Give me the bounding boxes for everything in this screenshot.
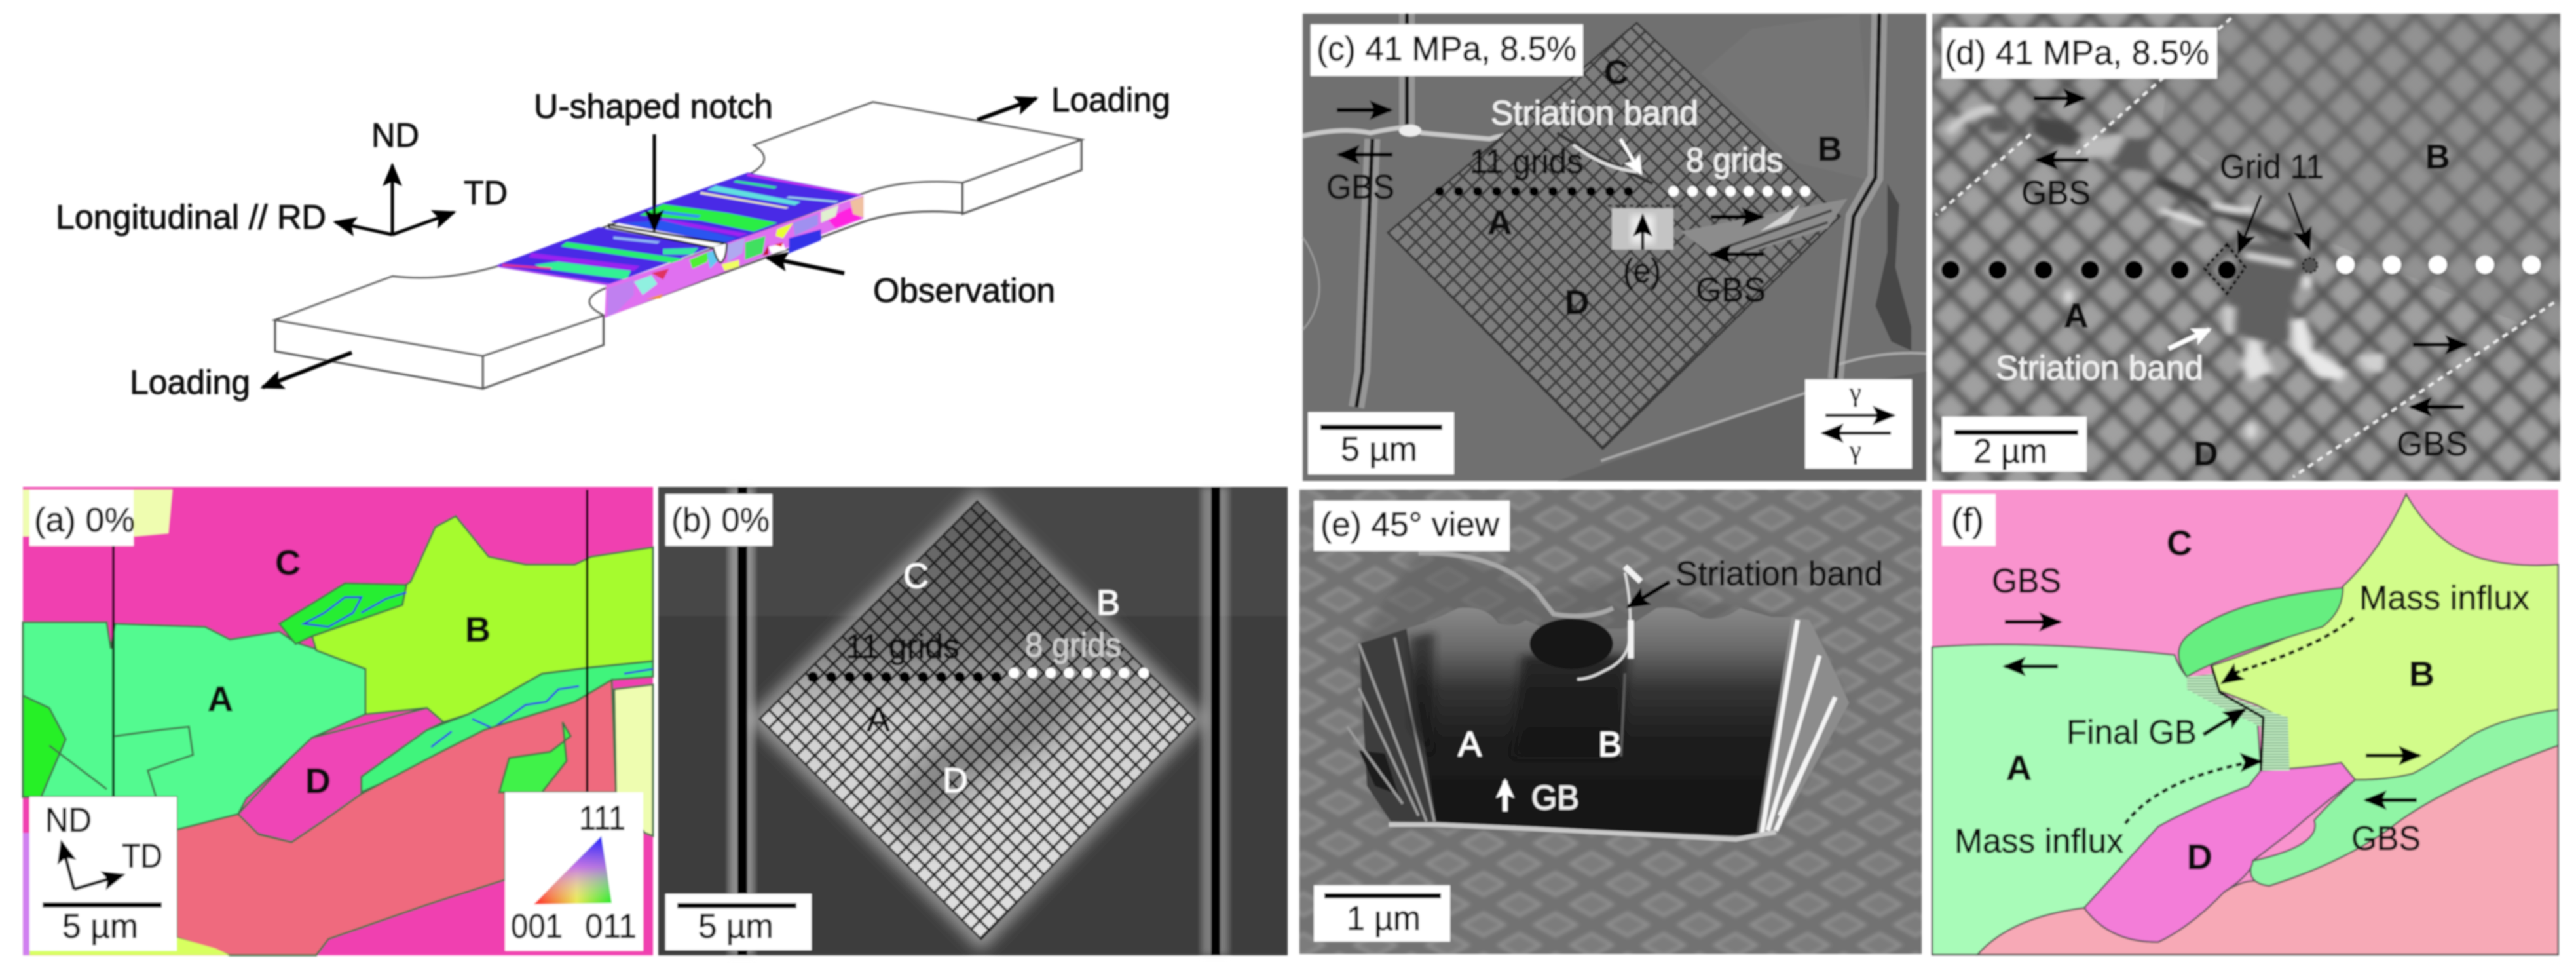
gauge top face, left part [496, 227, 710, 286]
inset marker for panel e [1608, 206, 1682, 250]
dots: white markers [2336, 256, 2541, 274]
dots: white markers [1668, 186, 1810, 197]
hatched mass influx zone [2187, 674, 2290, 771]
legend: axes and scale bar: TD [122, 837, 162, 875]
label: (d) 41 MPa: (d) 41 MPa, 8.5% [1945, 34, 2209, 72]
label: 11 grids: 11 grids [846, 628, 960, 666]
legend: shear direction: γ [1849, 435, 1861, 465]
grid diamond [1382, 20, 1847, 452]
arrows: GBS lower [2366, 756, 2419, 800]
grain A [23, 622, 365, 830]
salmon grain [1977, 746, 2558, 955]
label: striation band: Striation band [1996, 349, 2203, 387]
arrows: GBS upper [2005, 622, 2060, 666]
panel: (b) SEM 0% [658, 487, 1288, 955]
arrow: top loading [977, 98, 1036, 120]
arrow: upper influx head [2222, 671, 2240, 683]
twin band lower [362, 661, 653, 792]
grain B [312, 516, 653, 722]
legend: axes and scale bar: 5 µm [62, 908, 138, 946]
letter C: C [2167, 524, 2192, 563]
grain A [1932, 645, 2261, 955]
grid 11 end marker [2303, 258, 2317, 273]
label: (b) 0%: (b) 0% [671, 501, 770, 539]
label: (c) 41 MPa: (c) 41 MPa, 8.5% [1316, 30, 1577, 68]
label: (e) 45 view [1314, 501, 1510, 551]
gauge top face, right part [610, 172, 862, 244]
label: GBS lower: GBS [2351, 820, 2421, 858]
letter D: D [1565, 284, 1590, 322]
dots: black markers [1941, 261, 2236, 279]
scale bar: 1 µm [1347, 900, 1421, 938]
letter A: A [208, 680, 233, 719]
final grain boundary [2212, 666, 2264, 771]
panel: (d) magnified SEM [1919, 0, 2574, 495]
letter C: C [903, 556, 929, 596]
label: final GB: Final GB [2066, 714, 2197, 752]
label: 8 grids: 8 grids [1686, 142, 1783, 180]
label: (a) 0%: (a) 0% [34, 501, 135, 539]
panel: specimen schematic [56, 81, 1170, 402]
letter C: C [275, 543, 301, 583]
label: GBS upper: GBS [1992, 562, 2061, 600]
dashed white grain boundaries [1936, 18, 2554, 477]
arrows: GBS left boundary [1337, 110, 1392, 155]
lower GBS band [2250, 710, 2558, 886]
letter D: D [2193, 435, 2218, 473]
panel: (a) orientation map [23, 487, 653, 955]
letter D: D [943, 761, 968, 800]
arrow: inset pointer [1641, 216, 1644, 250]
label: GBS lower: GBS [2397, 425, 2468, 463]
scale bar [1308, 412, 1454, 474]
label: ND: ND [371, 117, 419, 155]
label: 11 grids: 11 grids [1470, 143, 1583, 181]
scale bar [1942, 417, 2087, 472]
legend: inverse pole figure: 111 [579, 799, 625, 837]
label: mass influx lower: Mass influx [1954, 822, 2123, 860]
grain regions [1932, 494, 2558, 955]
grid texture and deformation [1919, 0, 2574, 495]
label: striation band: Striation band [1491, 94, 1698, 132]
panel: (f) schematic [1932, 490, 2558, 955]
label: GBS left: GBS [1326, 168, 1394, 206]
letter A: A [2064, 297, 2089, 335]
letter B: B [2409, 655, 2435, 694]
label: bottom loading: Loading [130, 364, 250, 402]
arrows: GBS upper [2034, 98, 2089, 160]
specimen outline [275, 102, 1081, 389]
arrows: GBS lower [2411, 345, 2466, 407]
arrows: GBS right boundary [1711, 217, 1764, 254]
scale bar [1314, 885, 1450, 942]
dashed diamond around grid 11 [2205, 244, 2245, 294]
legend: inverse pole figure: 001 [511, 908, 563, 946]
arrow: lower influx head [2247, 761, 2261, 762]
scale bar: 5 µm [698, 908, 774, 946]
arrow: bottom loading [263, 353, 352, 387]
legend: inverse pole figure [505, 792, 643, 951]
dots: 11 black grid markers [808, 672, 1001, 682]
panel: (e) 45 degree view [1286, 476, 1935, 967]
surface texture and FIB pit [1286, 476, 1935, 967]
grain D [2084, 763, 2355, 942]
dashed influx paths [2125, 617, 2353, 824]
arrows: grid 11 pointers [2239, 193, 2309, 252]
label: (e) 45 view: (e) 45° view [1320, 506, 1499, 544]
legend: shear direction [1805, 377, 1912, 469]
letter D: D [2187, 837, 2212, 877]
arrow: final GB pointer [2203, 710, 2245, 735]
twin band upper [279, 583, 407, 644]
salmon grain [177, 680, 616, 955]
letter A: A [1487, 204, 1512, 242]
grain B [2212, 494, 2558, 780]
panel: (c) SEM 41 MPa [1303, 14, 1926, 481]
letter A: A [1458, 725, 1482, 764]
label: GBS right: GBS [1696, 271, 1766, 309]
grain D [238, 708, 443, 842]
gauge side face [605, 195, 863, 318]
letter B: B [465, 610, 491, 649]
label: GB: GB [1531, 779, 1579, 817]
arrow: observation pointer [767, 258, 844, 273]
vertical fiducial lines [728, 487, 1229, 955]
glow around grid [760, 501, 1195, 939]
grid diamond [740, 498, 1218, 944]
legend: shear direction: γ [1849, 377, 1861, 407]
arrow: striation pointer [1628, 582, 1670, 607]
legend: axes and scale bar [29, 797, 177, 951]
label: (a) 0% [29, 490, 135, 546]
surface features [1303, 14, 1926, 481]
legend: axes and scale bar: ND [45, 801, 92, 839]
arrow: notch pointer [652, 134, 656, 231]
label: top loading: Loading [1051, 81, 1170, 119]
letter B: B [1818, 130, 1842, 168]
label: (e): (e) [1623, 252, 1661, 290]
icon: axes triad [335, 165, 454, 235]
label: mass influx upper: Mass influx [2359, 579, 2529, 617]
label: TD: TD [464, 174, 508, 212]
letter B: B [1096, 583, 1120, 623]
arrow: striation pointer [1620, 139, 1641, 173]
label: (f): (f) [1951, 501, 1984, 539]
label: (b) 0% [665, 494, 772, 546]
label: (f) [1942, 494, 1996, 546]
arrow: striation pointer [2169, 330, 2209, 349]
letter D: D [305, 761, 331, 801]
letter A: A [867, 700, 890, 739]
letter B: B [2425, 138, 2450, 176]
grain-map gauge section [496, 172, 863, 318]
label: longitudinal RD: Longitudinal // RD [56, 199, 326, 237]
label: observation: Observation [873, 272, 1055, 310]
label: 8 grids: 8 grids [1025, 626, 1121, 664]
striation deformation zone [1558, 133, 1848, 261]
legend: inverse pole figure: 011 [585, 908, 637, 946]
label: striation band: Striation band [1675, 555, 1883, 593]
label: grid 11: Grid 11 [2220, 148, 2324, 186]
label: U-shaped notch: U-shaped notch [534, 88, 773, 126]
dots: black markers [1435, 187, 1633, 196]
letter A: A [2006, 748, 2032, 788]
letter B: B [1598, 725, 1622, 764]
scale bar: 2 µm [1973, 432, 2047, 470]
letter C: C [1604, 54, 1629, 92]
dots: 8 white grid markers [1009, 668, 1149, 678]
grain map regions [23, 490, 653, 955]
scale bar: 5 µm [1341, 431, 1417, 469]
arrow: GB pointer [1503, 781, 1508, 811]
scale bar [665, 894, 812, 950]
U-shaped notch [609, 225, 727, 263]
green lens [2178, 588, 2343, 677]
label: GBS upper: GBS [2021, 174, 2091, 212]
